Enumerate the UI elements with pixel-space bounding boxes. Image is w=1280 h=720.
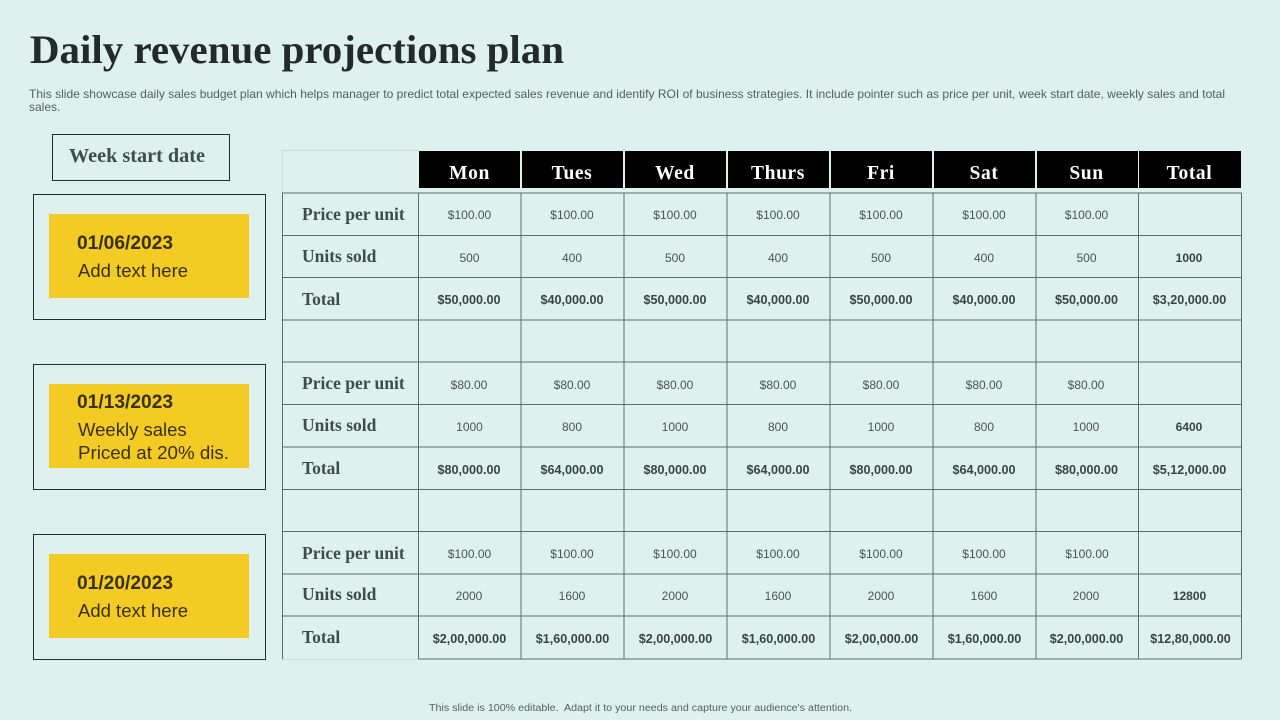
week 1: total row <box>302 289 1226 309</box>
week 3: total row: $2,00,000.00 <box>1050 632 1123 646</box>
week 3: units sold row: 12800 <box>1173 589 1207 603</box>
week 3: price per unit row: $100.00 <box>653 547 697 561</box>
week 2: units sold row: Units sold <box>302 415 377 435</box>
week 2: price per unit row: $80.00 <box>554 378 591 392</box>
week 1: price per unit row: $100.00 <box>550 208 594 222</box>
week 2: total row: $64,000.00 <box>746 463 810 477</box>
week 1: units sold row <box>302 246 1203 266</box>
panel: week of 01/13/2023: Priced at 20% dis. <box>78 442 229 463</box>
week 3: total row: $1,60,000.00 <box>536 632 609 646</box>
table header row: Fri <box>867 163 895 184</box>
week 2: price per unit row: $80.00 <box>657 378 694 392</box>
table header row: Mon <box>449 163 490 184</box>
week 2: units sold row: 1000 <box>662 420 689 434</box>
table header row: Tues <box>552 163 592 184</box>
week 2: total row: Total <box>302 458 340 478</box>
week 2: total row: $64,000.00 <box>540 463 604 477</box>
week 3: total row: Total <box>302 627 340 647</box>
week 2: price per unit row: $80.00 <box>451 378 488 392</box>
table grid <box>282 150 1242 660</box>
week 3: total row: $1,60,000.00 <box>742 632 815 646</box>
week 1: units sold row: 500 <box>665 251 685 265</box>
week 1: price per unit row: $100.00 <box>859 208 903 222</box>
panel: week of 01/06/2023 <box>34 194 266 320</box>
week 1: units sold row: 1000 <box>1176 251 1203 265</box>
week 3: units sold row: 2000 <box>662 589 689 603</box>
week 2: price per unit row <box>302 373 1105 393</box>
week 3: units sold row: 2000 <box>868 589 895 603</box>
panel: week of 01/13/2023 <box>34 364 266 490</box>
week 3: total row: $1,60,000.00 <box>948 632 1021 646</box>
week 3: total row <box>302 627 1231 647</box>
week 2: price per unit row: $80.00 <box>966 378 1003 392</box>
week 1: total row: $40,000.00 <box>746 293 810 307</box>
week 2: total row: $80,000.00 <box>1055 463 1118 477</box>
table header row: Sun <box>1069 163 1104 184</box>
week 2: units sold row: 6400 <box>1176 420 1203 434</box>
week 1: total row: $50,000.00 <box>849 293 913 307</box>
week 2: units sold row <box>302 415 1203 435</box>
panel: week of 01/20/2023 <box>34 534 266 660</box>
week 3: units sold row: Units sold <box>302 584 377 604</box>
week 3: price per unit row: $100.00 <box>962 547 1006 561</box>
week 3: price per unit row: $100.00 <box>1065 547 1109 561</box>
panel: week of 01/06/2023: 01/06/2023 <box>77 233 173 254</box>
week 1: total row: $50,000.00 <box>1055 293 1118 307</box>
week 2: units sold row: 1000 <box>456 420 483 434</box>
week 1: total row: $40,000.00 <box>952 293 1016 307</box>
week 1: price per unit row: $100.00 <box>448 208 492 222</box>
week 3: total row: $2,00,000.00 <box>639 632 712 646</box>
week 1: units sold row: Units sold <box>302 246 377 266</box>
subtitle description: This slide showcase daily sales budget plan which helps manager to predict total expected sales revenue and identify ROI of business strategies. It include pointer such as price per unit, week start date, weekly sales and total <box>29 87 1225 101</box>
week 2: total row: $80,000.00 <box>643 463 707 477</box>
panel: week of 01/20/2023: 01/20/2023 <box>77 573 173 594</box>
table header row: Thurs <box>751 163 805 184</box>
subtitle description <box>29 87 1225 114</box>
panel: week of 01/13/2023: Weekly sales <box>78 419 187 440</box>
week 3: total row: $2,00,000.00 <box>433 632 506 646</box>
panel: week of 01/06/2023: Add text here <box>78 260 188 281</box>
week 1: units sold row: 500 <box>1076 251 1097 265</box>
week 3: units sold row: 1600 <box>971 589 998 603</box>
week 2: units sold row: 1000 <box>868 420 895 434</box>
week 3: units sold row <box>302 584 1207 604</box>
week 2: units sold row: 800 <box>974 420 994 434</box>
week 2: total row: $5,12,000.00 <box>1153 463 1226 477</box>
week 2: total row: $64,000.00 <box>952 463 1016 477</box>
week 1: price per unit row <box>302 204 1109 224</box>
table header row <box>419 151 1241 188</box>
week 1: price per unit row: $100.00 <box>756 208 800 222</box>
week 3: units sold row: 1600 <box>765 589 792 603</box>
panel: week of 01/20/2023: Add text here <box>78 600 188 621</box>
subtitle description: sales. <box>29 100 60 114</box>
week 1: total row: $50,000.00 <box>643 293 707 307</box>
week 2: price per unit row: $80.00 <box>760 378 797 392</box>
week 3: units sold row: 2000 <box>1073 589 1100 603</box>
panel: week of 01/13/2023: 01/13/2023 <box>77 392 173 413</box>
week 3: price per unit row: $100.00 <box>756 547 800 561</box>
week 2: total row: $80,000.00 <box>437 463 501 477</box>
table header row: Wed <box>655 163 695 184</box>
week 2: units sold row: 800 <box>768 420 788 434</box>
footer note: This slide is 100% editable. Adapt it to your needs and capture your audience's attention. <box>429 703 852 714</box>
title: Daily revenue projections plan <box>30 27 564 72</box>
week 2: price per unit row: $80.00 <box>863 378 900 392</box>
week 3: price per unit row <box>302 543 1109 563</box>
week 1: units sold row: 500 <box>871 251 891 265</box>
week 3: price per unit row: Price per unit <box>302 543 405 563</box>
week 2: total row <box>302 458 1226 478</box>
heading: week start date: Week start date <box>69 146 205 167</box>
week 1: units sold row: 400 <box>562 251 582 265</box>
week 2: price per unit row: $80.00 <box>1068 378 1105 392</box>
week 1: units sold row: 500 <box>459 251 480 265</box>
week 1: total row: Total <box>302 289 340 309</box>
week 3: price per unit row: $100.00 <box>550 547 594 561</box>
week 1: price per unit row: Price per unit <box>302 204 405 224</box>
week 3: total row: $2,00,000.00 <box>845 632 918 646</box>
week 3: price per unit row: $100.00 <box>448 547 492 561</box>
week 1: price per unit row: $100.00 <box>653 208 697 222</box>
week 1: units sold row: 400 <box>768 251 788 265</box>
week 3: price per unit row: $100.00 <box>859 547 903 561</box>
week 3: total row: $12,80,000.00 <box>1150 632 1231 646</box>
week 2: total row: $80,000.00 <box>849 463 913 477</box>
week 1: units sold row: 400 <box>974 251 994 265</box>
week 3: units sold row: 1600 <box>559 589 586 603</box>
heading: week start date <box>52 134 230 180</box>
week 1: price per unit row: $100.00 <box>1065 208 1109 222</box>
week 1: price per unit row: $100.00 <box>962 208 1006 222</box>
table header row: Total <box>1167 163 1212 184</box>
week 1: total row: $40,000.00 <box>540 293 604 307</box>
week 2: units sold row: 800 <box>562 420 582 434</box>
week 3: units sold row: 2000 <box>456 589 483 603</box>
week 1: total row: $50,000.00 <box>437 293 501 307</box>
table header row: Sat <box>970 163 998 184</box>
week 2: price per unit row: Price per unit <box>302 373 405 393</box>
week 2: units sold row: 1000 <box>1073 420 1100 434</box>
week 1: total row: $3,20,000.00 <box>1153 293 1226 307</box>
